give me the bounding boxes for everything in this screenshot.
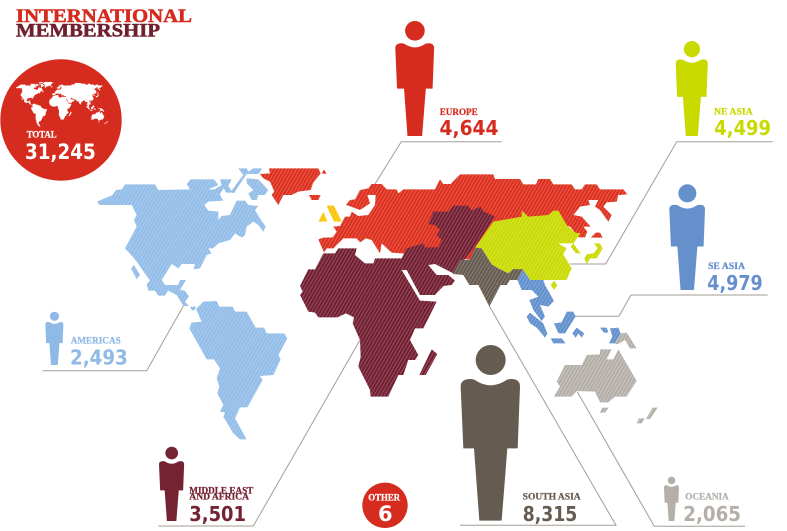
mini world map icon	[16, 82, 108, 126]
stat: South Asia: 8,315	[523, 502, 577, 526]
region: Greenland, Europe	[260, 168, 327, 205]
title	[16, 6, 192, 42]
stat: Oceania: OCEANIA	[685, 493, 729, 503]
world map	[97, 168, 658, 439]
stat: Middle East and Africa: MIDDLE EAST	[189, 486, 254, 496]
stat: SE Asia: 4,979	[707, 271, 763, 295]
region: Americas	[97, 168, 287, 439]
stat: NE Asia	[676, 41, 771, 140]
total membership circle: 31,245	[25, 140, 96, 164]
stat: Other	[362, 483, 408, 528]
title: MEMBERSHIP	[16, 21, 160, 42]
stat: South Asia: SOUTH ASIA	[523, 492, 581, 502]
stat: South Asia	[461, 345, 581, 526]
title: INTERNATIONAL	[16, 6, 192, 27]
region: Europe and Russia	[318, 174, 627, 260]
stat: Middle East and Africa: AND AFRICA	[189, 493, 249, 503]
stat: Oceania: 2,065	[683, 502, 741, 526]
stat: Oceania	[664, 477, 741, 526]
total membership circle	[0, 59, 122, 181]
total membership circle: TOTAL	[27, 131, 57, 141]
region: Middle East and Africa	[300, 206, 495, 397]
region: NE Asia	[475, 211, 603, 290]
region: SE Asia	[517, 270, 621, 343]
stat: Other: 6	[378, 502, 393, 526]
stat: Other: OTHER	[368, 494, 400, 504]
stat: Americas	[45, 312, 128, 369]
stat: SE Asia: SE ASIA	[708, 262, 745, 272]
stat: Middle East and Africa	[159, 447, 254, 526]
stat: Europe: 4,644	[440, 116, 498, 140]
stat: Americas: AMERICAS	[71, 337, 121, 347]
stat: NE Asia: NE ASIA	[714, 108, 753, 118]
region: Iceland and UK, other	[318, 206, 342, 222]
leader lines	[42, 142, 773, 526]
region: Oceania	[554, 333, 658, 423]
stat: Middle East and Africa: 3,501	[189, 502, 246, 526]
stat: Americas: 2,493	[70, 345, 128, 369]
stat: NE Asia: 4,499	[714, 116, 771, 140]
region: South Asia	[453, 248, 523, 307]
stat: SE Asia	[669, 184, 763, 295]
stat: Europe	[395, 21, 498, 140]
stat: Europe: EUROPE	[440, 108, 478, 118]
